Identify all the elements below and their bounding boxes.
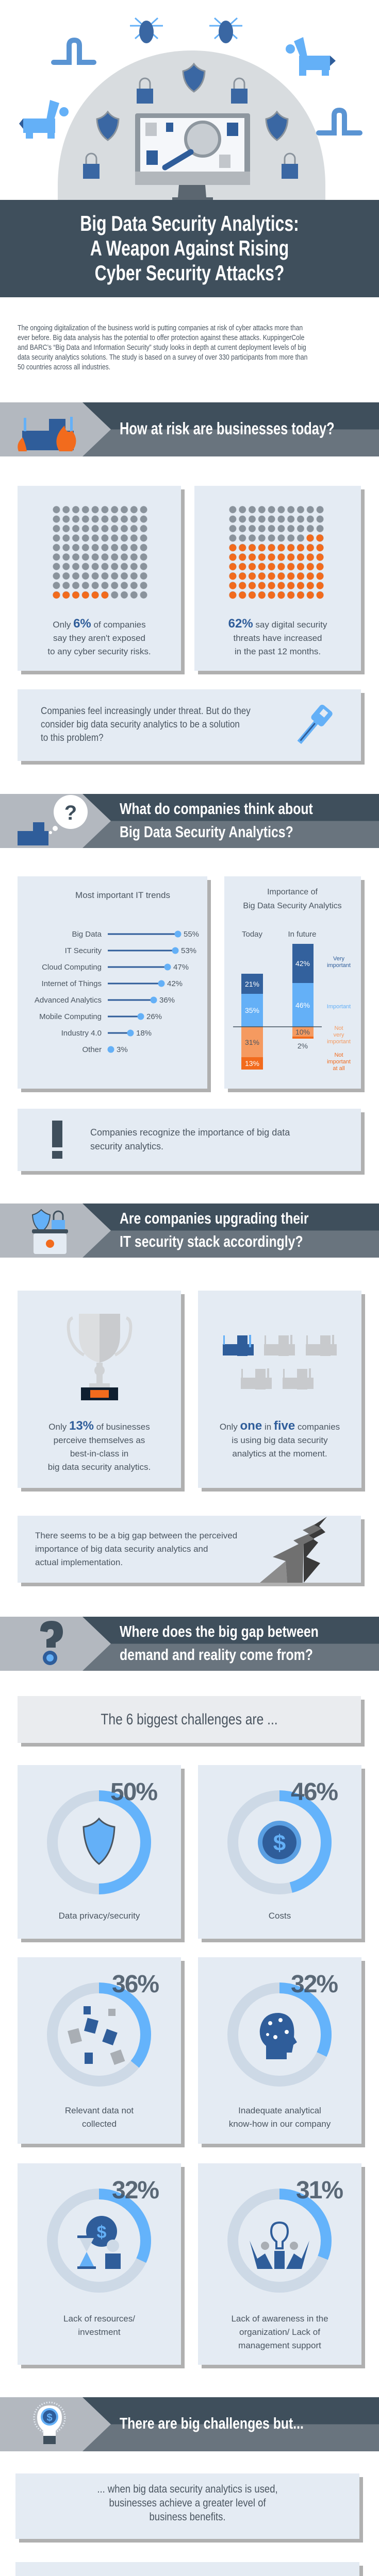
- challenge: know-how 32%: Inadequate analytical: [238, 2106, 321, 2115]
- header: big challenges but: $: [46, 2412, 53, 2424]
- card: importance chart: Not: [334, 1052, 343, 1058]
- challenge: costs 46%: $: [273, 1831, 286, 1856]
- icon: key: [297, 705, 333, 744]
- challenge: costs 46%: [198, 1765, 361, 1939]
- card: importance chart: 35%: [245, 1006, 259, 1014]
- title band: Big Data Security Analytics:: [80, 211, 299, 235]
- card: 6%: Only 6% of companies: [53, 617, 146, 631]
- header: how at risk: How at risk are businesses today?: [120, 419, 335, 438]
- icon: crack: [260, 1517, 327, 1583]
- card: importance chart: important: [327, 1059, 351, 1065]
- card: importance chart: Not: [334, 1025, 343, 1031]
- card: IT trends chart: 36%: [159, 996, 175, 1005]
- card: 6%: say they aren't exposed: [53, 633, 145, 643]
- challenge: awareness 31%: organization/ Lack of: [239, 2327, 320, 2337]
- challenge: relevant data 36%: Relevant data not: [65, 2106, 134, 2115]
- card: one in five: is using big data security: [232, 1435, 328, 1445]
- card: importance chart: Importance of: [267, 888, 318, 896]
- challenge: awareness 31%: management support: [238, 2341, 321, 2350]
- card: gap: There seems to be a big gap between the perceived: [35, 1531, 237, 1540]
- card: IT trends chart: 42%: [167, 979, 183, 988]
- title band: [0, 200, 379, 297]
- challenge: know-how 32%: 32%: [291, 1971, 337, 1998]
- card: gap: importance of big data security analytics and: [35, 1544, 208, 1554]
- card: importance chart: 46%: [295, 1001, 310, 1009]
- header: where does the gap come from: Where does the big gap between: [120, 1622, 319, 1640]
- card: IT trends chart: 53%: [181, 946, 196, 955]
- icon: trophy: [67, 1314, 132, 1400]
- header: where does the gap come from: demand and reality come from?: [120, 1646, 313, 1664]
- card: gap: [18, 1516, 361, 1583]
- card: IT trends chart: Big Data: [72, 930, 102, 939]
- intro text: and BARC’s “Big Data and Information Security” study looks in depth at current deployment levels of big: [18, 344, 306, 352]
- card: importance chart: 21%: [245, 980, 259, 988]
- challenge: resources 32%: [18, 2163, 181, 2365]
- challenge: resources 32%: investment: [78, 2327, 121, 2337]
- header: what do companies think: Big Data Security Analytics?: [120, 823, 293, 841]
- card: IT trends chart: [18, 876, 207, 1089]
- header: where does the gap come from: [0, 1617, 379, 1671]
- card: key question: to this problem?: [41, 733, 104, 743]
- card: IT trends chart: Advanced Analytics: [35, 996, 102, 1005]
- card: 13% trophy: perceive themselves as: [54, 1435, 145, 1445]
- card: IT trends chart: 47%: [173, 963, 189, 972]
- card: gap: actual implementation.: [35, 1557, 123, 1567]
- challenge: know-how 32%: [198, 1957, 361, 2144]
- card: IT trends chart: Mobile Computing: [39, 1012, 102, 1021]
- intro text: 50 countries across all industries.: [18, 363, 110, 371]
- title band: Cyber Security Attacks?: [95, 261, 284, 285]
- header: big challenges but: There are big challenges but...: [120, 2414, 304, 2432]
- challenge: relevant data 36%: [18, 1957, 181, 2144]
- challenge: resources 32%: $: [97, 2223, 107, 2242]
- intro text: [18, 324, 307, 371]
- challenge: relevant data 36%: 36%: [112, 1971, 158, 1998]
- challenge: relevant data 36%: collected: [82, 2119, 117, 2129]
- challenge: awareness 31%: 31%: [296, 2177, 342, 2204]
- card: 62%: 62% say digital security: [228, 617, 327, 631]
- card: recognize importance: security analytics.: [90, 1141, 163, 1151]
- challenge: awareness 31%: [198, 2163, 361, 2365]
- challenge: know-how 32%: know-how in our company: [229, 2119, 331, 2129]
- card: one in five: [198, 1291, 361, 1488]
- card: 6%: to any cyber security risks.: [47, 647, 151, 656]
- card: importance chart: Important: [327, 1004, 351, 1010]
- title band: A Weapon Against Rising: [90, 236, 289, 260]
- card: recognize importance: [18, 1109, 361, 1171]
- card: 13% trophy: big data security analytics.: [48, 1462, 151, 1472]
- card: importance chart: important: [327, 962, 351, 969]
- card: 13% trophy: best-in-class in: [70, 1449, 128, 1459]
- card: IT trends chart: Internet of Things: [42, 979, 102, 988]
- header: upgrading: Are companies upgrading their: [120, 1209, 309, 1227]
- card: importance chart: Big Data Security Analytics: [243, 902, 342, 910]
- card: importance chart: [224, 876, 361, 1089]
- card: IT trends chart: IT Security: [65, 946, 102, 955]
- intro text: ever before. Big data analysis has the potential to offer protection against these attacks. KuppingerCole: [18, 334, 304, 342]
- card: 6%: [18, 486, 181, 671]
- card: one in five: Only one in five companies: [220, 1419, 340, 1433]
- card: benefits donut: [15, 2562, 359, 2576]
- header: what do companies think: [0, 794, 379, 848]
- card: IT trends chart: Other: [82, 1045, 102, 1054]
- card: IT trends chart: 55%: [184, 930, 199, 939]
- header: big challenges but: [0, 2397, 379, 2451]
- card: IT trends chart: Cloud Computing: [42, 963, 102, 972]
- card: 13% trophy: Only 13% of businesses: [48, 1419, 150, 1433]
- card: 62%: in the past 12 months.: [235, 647, 321, 656]
- challenge: resources 32%: Lack of resources/: [63, 2314, 135, 2324]
- card: 6 biggest challenges: [18, 1696, 361, 1743]
- hero illustration: [19, 18, 362, 200]
- intro text: data security analytics solutions. The study is based on a survey of over 330 participants from more than: [18, 353, 307, 362]
- card: recognize importance: Companies recognize the importance of big data: [90, 1127, 290, 1138]
- card: IT trends chart: 26%: [146, 1012, 162, 1021]
- header: what do companies think: What do companies think about: [120, 800, 313, 818]
- card: IT trends chart: 18%: [136, 1029, 152, 1038]
- header: upgrading: IT security stack accordingly?: [120, 1232, 303, 1250]
- card: importance chart: very: [334, 1032, 344, 1038]
- card: 13% trophy: [18, 1291, 181, 1488]
- card: key question: consider big data security analytics to be a solution: [41, 719, 240, 730]
- card: importance chart: 10%: [295, 1028, 310, 1036]
- card: business benefits intro: business benefits.: [150, 2511, 225, 2523]
- card: importance chart: 31%: [245, 1038, 259, 1046]
- header: upgrading: [0, 1204, 379, 1258]
- card: 62%: threats have increased: [233, 633, 322, 643]
- card: 62%: [194, 486, 361, 671]
- card: importance chart: 13%: [245, 1059, 259, 1067]
- card: importance chart: In future: [288, 930, 317, 939]
- challenge: data privacy 50%: 50%: [110, 1778, 157, 1806]
- icon: exclamation: [52, 1121, 62, 1159]
- intro text: The ongoing digitalization of the business world is putting companies at risk of cyber attacks more than: [18, 324, 303, 332]
- card: business benefits intro: ... when big data security analytics is used,: [97, 2483, 278, 2495]
- card: business benefits intro: [15, 2473, 359, 2539]
- card: 6 biggest challenges: The 6 biggest challenges are ...: [101, 1711, 278, 1728]
- card: importance chart: Today: [242, 930, 263, 939]
- card: IT trends chart: Industry 4.0: [61, 1029, 102, 1038]
- header: how at risk: [0, 402, 379, 456]
- challenge: data privacy 50%: [18, 1765, 181, 1939]
- card: IT trends chart: 3%: [117, 1045, 128, 1054]
- card: importance chart: at all: [333, 1065, 345, 1072]
- card: importance chart: 42%: [295, 959, 310, 968]
- challenge: costs 46%: 46%: [291, 1778, 337, 1806]
- icon: five factories: [223, 1335, 337, 1389]
- card: importance chart: important: [327, 1039, 351, 1045]
- card: key question: [18, 689, 361, 761]
- card: importance chart: 2%: [298, 1042, 308, 1050]
- challenge: resources 32%: 32%: [112, 2177, 158, 2204]
- card: business benefits intro: businesses achieve a greater level of: [109, 2497, 266, 2509]
- challenge: costs 46%: Costs: [269, 1911, 291, 1921]
- card: IT trends chart: Most important IT trends: [75, 890, 170, 900]
- card: importance chart: Very: [333, 956, 345, 962]
- challenge: awareness 31%: Lack of awareness in the: [231, 2314, 328, 2324]
- card: key question: Companies feel increasingly under threat. But do they: [41, 706, 251, 717]
- challenge: data privacy 50%: Data privacy/security: [59, 1911, 140, 1921]
- card: one in five: analytics at the moment.: [232, 1449, 327, 1459]
- header: what do companies think: ?: [64, 802, 77, 824]
